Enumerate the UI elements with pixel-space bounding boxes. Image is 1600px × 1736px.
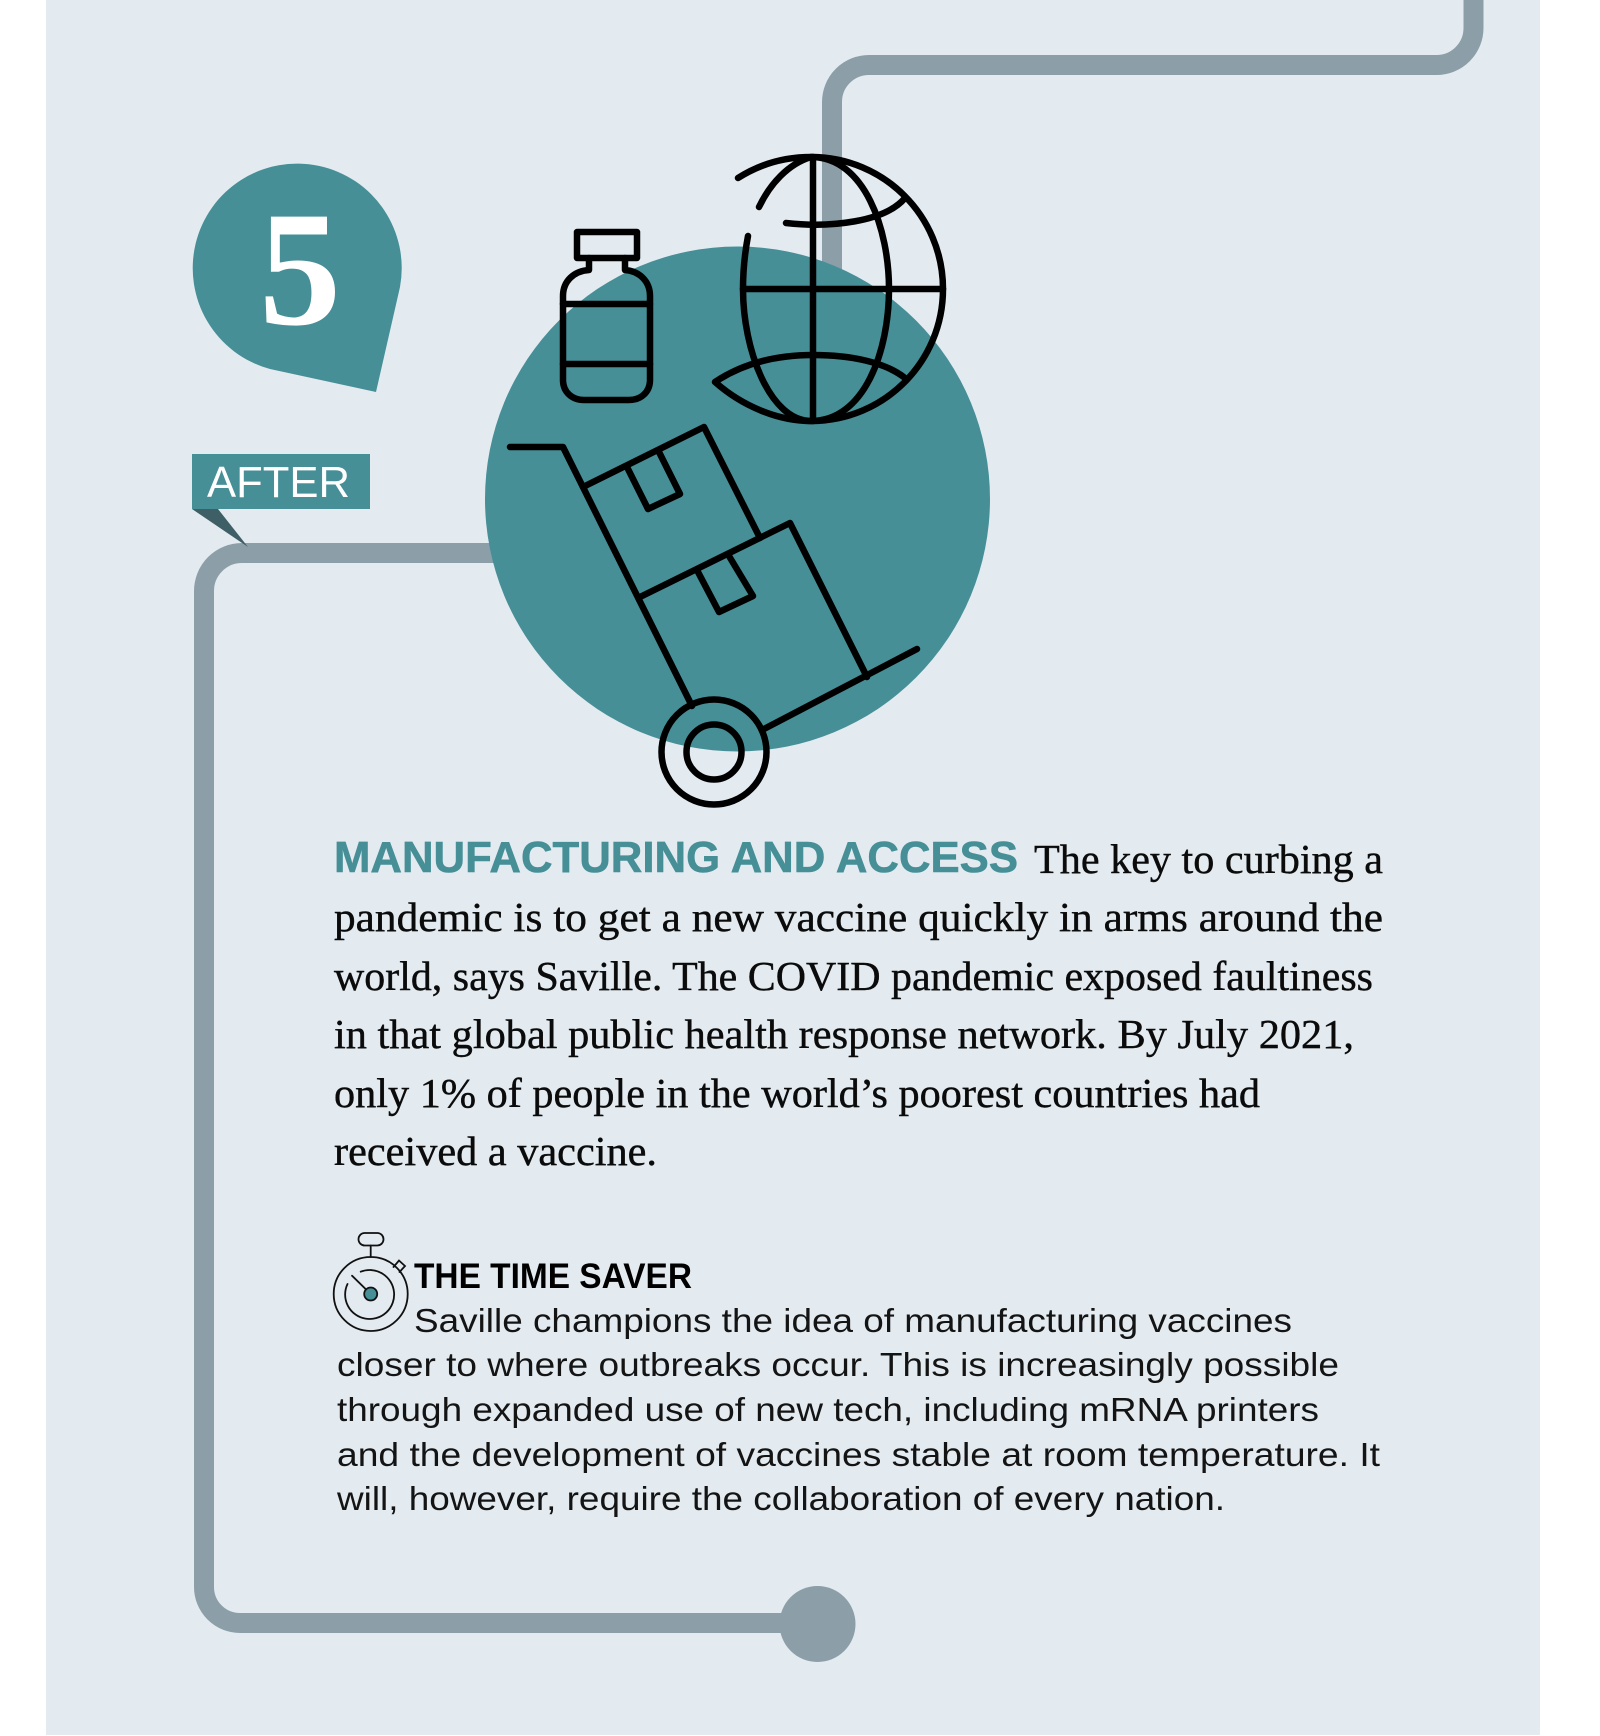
- body text: The key to curbing a: [1034, 836, 1383, 882]
- icon: vaccine vial: [563, 232, 650, 400]
- number badge: 5: 5: [259, 179, 341, 360]
- number badge: 5: [193, 164, 402, 392]
- body text: will, however, require the collaboration of every nation.: [336, 1480, 1225, 1517]
- teal circle behind icons: [485, 246, 990, 752]
- timeline connector: top right path: [832, 0, 1474, 300]
- body text: and the development of vaccines stable at room temperature. It: [337, 1436, 1380, 1473]
- body text: in that global public health response network. By July 2021,: [334, 1011, 1354, 1057]
- body text: closer to where outbreaks occur. This is increasingly possible: [337, 1346, 1339, 1383]
- text block: main description: [334, 833, 1383, 1174]
- body text: received a vaccine.: [334, 1128, 657, 1174]
- icon: hand truck with boxes: [510, 427, 917, 804]
- body text: only 1% of people in the world’s poorest countries had: [334, 1070, 1260, 1116]
- body text: through expanded use of new tech, including mRNA printers: [337, 1391, 1319, 1428]
- heading: manufacturing and access: MANUFACTURING AND ACCESS: [334, 833, 1018, 882]
- text block: the time saver: [336, 1256, 1380, 1517]
- body text: world, says Saville. The COVID pandemic exposed faultiness: [334, 953, 1373, 999]
- label: after flag: [192, 454, 370, 547]
- body text: Saville champions the idea of manufacturing vaccines: [414, 1302, 1292, 1339]
- label: after flag: AFTER: [207, 458, 350, 507]
- body text: [334, 836, 1383, 1174]
- body text: [336, 1302, 1380, 1517]
- icon: stopwatch: [334, 1233, 408, 1331]
- icon: globe: [715, 157, 943, 421]
- timeline connector: left path with end dot: [204, 553, 856, 1662]
- heading: the time saver: THE TIME SAVER: [414, 1256, 692, 1296]
- body text: pandemic is to get a new vaccine quickly in arms around the: [334, 894, 1383, 940]
